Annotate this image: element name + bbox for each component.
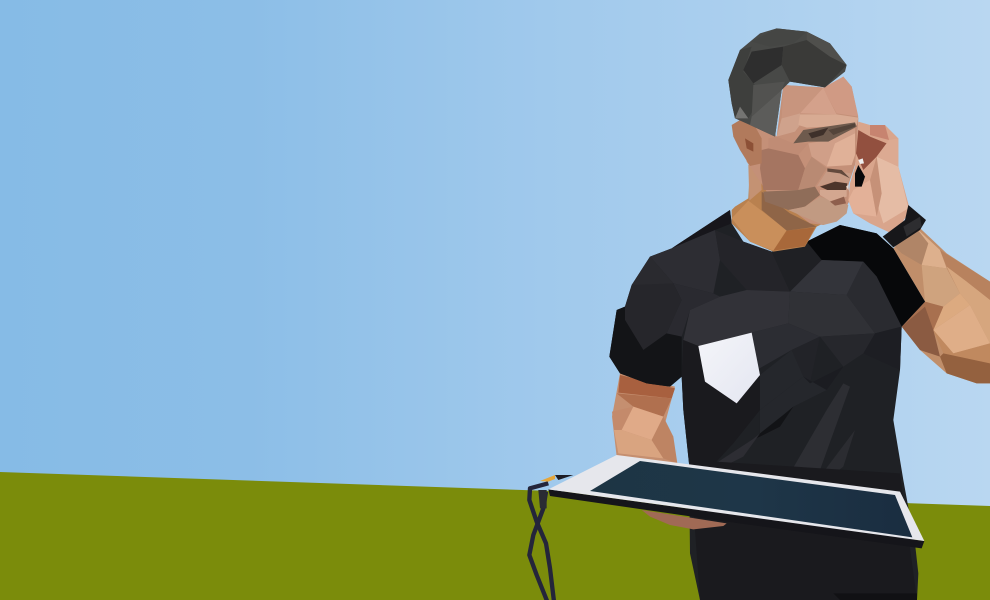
referee figure — [529, 28, 990, 600]
black t-shirt — [609, 210, 925, 600]
right upper arm — [893, 225, 990, 383]
ear — [732, 120, 762, 166]
lanyard strap — [529, 475, 573, 600]
head — [728, 28, 926, 252]
eye and brow — [793, 122, 857, 143]
left forearm — [612, 373, 677, 463]
nose shadow and mouth — [820, 168, 850, 206]
hand under tablet — [642, 510, 727, 529]
neck — [732, 160, 823, 252]
green pitch — [0, 472, 990, 600]
hand at ear — [848, 122, 910, 235]
tablet screen — [590, 461, 912, 537]
tablet — [548, 455, 924, 548]
wrist watch — [883, 205, 926, 247]
short hair — [728, 28, 847, 137]
shirt badge pocket — [698, 333, 760, 403]
face — [740, 77, 858, 225]
earpiece microphone — [855, 165, 865, 187]
